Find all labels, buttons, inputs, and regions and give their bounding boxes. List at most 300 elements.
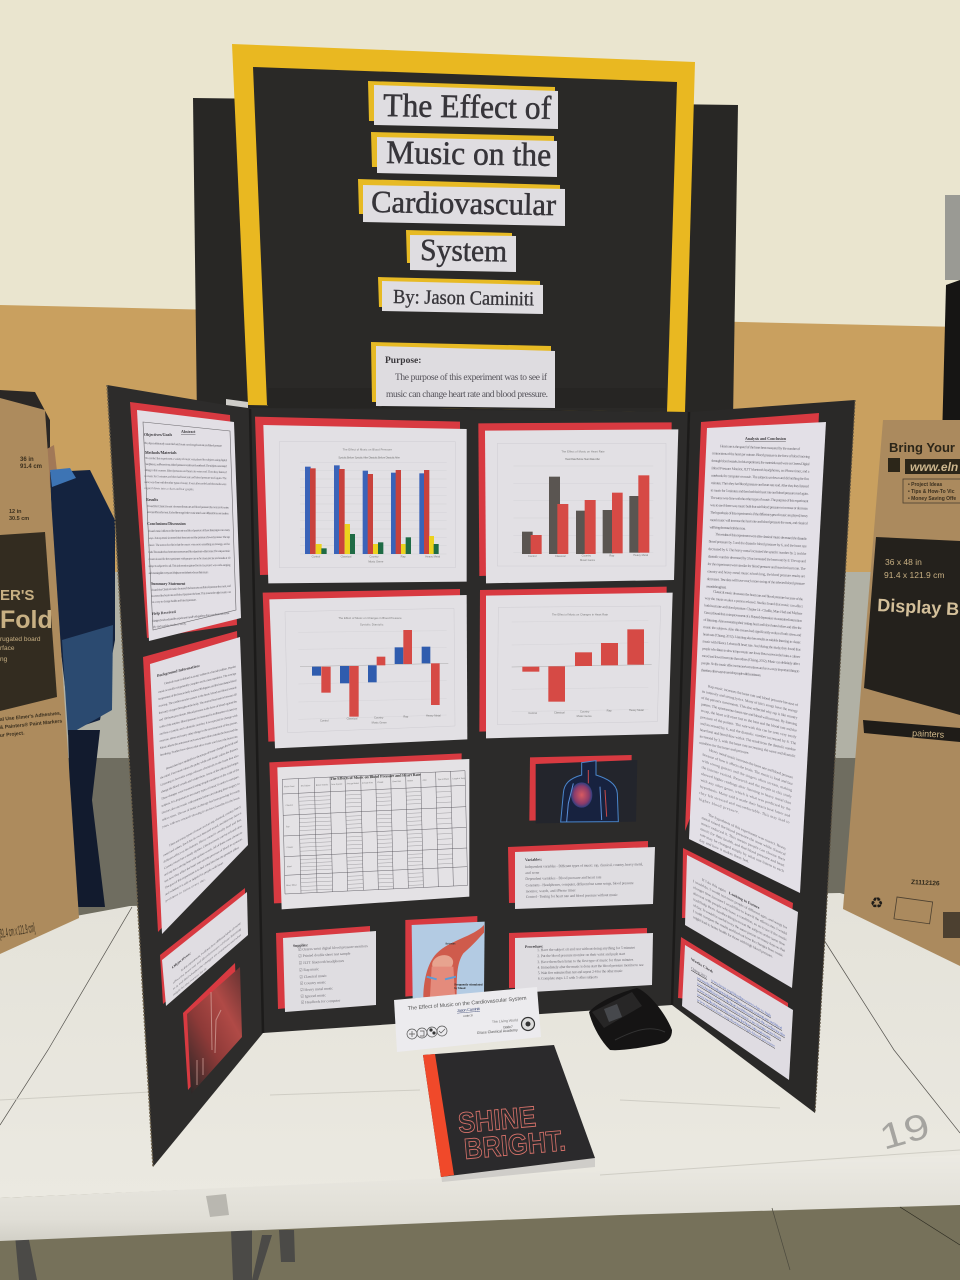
abstract text: The object of this study was to find out if music can change heart rate and blood pressure: [144, 441, 223, 448]
cardboard box: left: 12 in: [9, 509, 22, 515]
works cited list: www.heart.org/bloodpressure/what-is-high: [711, 977, 771, 1018]
background text: and rap has a strong beat with spoken words. All of these were chosen to: [164, 830, 243, 877]
abstract text: chosen is used for the experiment with proper care to be more precise and results at 10: [148, 556, 231, 561]
chart: effect of music on heart rate: Control: [528, 554, 537, 558]
chart: changes in blood pressure: Music Genre: [372, 721, 387, 725]
chart: changes in heart rate: Heavy Metal: [629, 708, 644, 712]
analysis text: music the subjects. Also this means had significantly reduced both stress and: [703, 625, 802, 637]
analysis text: to rap, the heart will react fast to the beat and the blood rate and the: [701, 709, 797, 734]
byline: [378, 277, 543, 314]
analysis text: pressure of the patient. The rate with this can be seen very easily: [700, 715, 797, 739]
background text: relieve stress. The use of music as therapy has been growing for many: [162, 788, 240, 822]
analysis text: mood and lower heart rate than others (Chiang, 2012). Music can definitely affect: [702, 654, 800, 667]
objectives text: Objectives:: [172, 950, 191, 970]
chart: effect of music on heart rate: [478, 422, 678, 583]
analysis text: Blood Pressure Monitor, JLTT bluetooth headphones, an iPhone timer, and a: [711, 466, 810, 475]
table grid: Classical: [286, 805, 293, 807]
objectives text: affect the heart rate and blood pressure of those listening: [173, 927, 241, 985]
table grid: Type of Music: [437, 777, 449, 781]
title line 4: System: [420, 232, 507, 269]
table grid: [282, 771, 468, 894]
box label text: [0, 587, 53, 663]
chart: changes in blood pressure: Systolic Diastolic: [360, 623, 384, 627]
table legs: [15, 1230, 295, 1280]
chart: changes in heart rate: The Effect of Music on Changes in Heart Rate: [552, 612, 609, 616]
background: grey lower wall: [0, 572, 960, 760]
background text: and whether it is safe or helpful for people with heart: [165, 861, 223, 896]
analysis text: of listening. Also measuring their resting heart and blood rates before and after the: [704, 618, 802, 630]
analysis text: music for their health, and that blood pressure and heart: [700, 827, 785, 869]
box label text: rface: [0, 645, 15, 652]
cardboard box: left: 36 in: [20, 457, 34, 463]
analysis text: music reduced it. This means people can choose their: [701, 821, 786, 862]
cardboard box: right: 91.4 x 121.9 cm: [884, 570, 944, 580]
black object and fan at right edge: [942, 195, 960, 452]
analysis text: The hypothesis of this experiment was correct. Heavy: [708, 813, 786, 851]
abstract text: subjects subjected to all. This information gained from my project was wide-ranging: [148, 563, 231, 568]
analysis text: for the experiment were similar for blood pressure and heart for heart rate. The: [707, 562, 806, 571]
analysis text: hypothesis. Many said it made their hearts beat faster and: [700, 784, 790, 818]
future text: I could compare the results and find out how the changes from music: [693, 909, 783, 958]
chart: changes in blood pressure: Rap: [403, 714, 409, 718]
variables text: Independent variables - Different types of music: rap, classical, country, heavy metal,: [525, 862, 643, 870]
background text: problems to listen every day.: [165, 877, 206, 903]
procedure list: 3. Have them then listen to the first type of music for three minutes: [537, 958, 634, 964]
supplies list: [293, 940, 371, 1005]
background text: These changes were measured using simple monitors on the wrist of the: [161, 767, 240, 801]
future text: a longer time, because I would like to learn if the effects stay. I would: [693, 885, 787, 937]
chart: effect of music on heart rate: Country: [582, 554, 592, 558]
analysis text: through blood vessels. In this experiment, the materials used were an Ozeres Digital: [711, 459, 810, 467]
future text: might lead to better health for those with high blood pressure.: [693, 915, 773, 959]
analysis text: of the person's movements. This also reflected why rap is like country: [701, 696, 798, 720]
chart: changes in blood pressure: Heavy Metal: [426, 713, 441, 717]
future text: could help them. Another thing is to test the subjects at the same time: [693, 897, 785, 947]
analysis text: therefore, other ways to use it for people with heart issues.: [701, 668, 761, 678]
analysis text: they felt stressed and uncomfortable. This may lead to: [699, 791, 790, 825]
data table: [269, 753, 469, 909]
abstract text: I designed and conducted the experiment myself with guidance from a professional mentor.: [152, 611, 230, 623]
works cited list: www.sciencedaily.com/releases/music-can-change-your-heart: [697, 986, 782, 1041]
analysis text: decreased by 6. The heavy metal increased the systolic number by 3, and the: [708, 547, 807, 557]
purpose card: [371, 342, 555, 408]
box right text: Bring Your: [889, 440, 955, 455]
supplies list: Supplies:: [293, 943, 308, 948]
cardboard box: right: Display B: [877, 595, 960, 619]
cardboard box: right: • Tips & How-To Vic: [908, 489, 955, 495]
chart: effect of music on blood pressure: Rap: [401, 554, 406, 558]
award icons: [407, 1026, 447, 1039]
notebook orange spine: [423, 1054, 454, 1177]
panel: procedure: [509, 928, 653, 993]
place card: Jason Caminiti: [457, 1006, 480, 1013]
supplies list: ☑ Classical music: [299, 974, 327, 979]
background text: There are many types of music such as rap, classical, country, heavy: [169, 804, 241, 849]
floor under table: [0, 1190, 960, 1280]
chart: changes in blood pressure: Classical: [347, 717, 358, 721]
chart: effect of music on heart rate: Rap: [609, 553, 615, 557]
table grid: Before: [407, 779, 413, 782]
trifold: left panel: [107, 385, 263, 1167]
place card: The Living World: [492, 1018, 518, 1024]
analysis text: Rap music increases the heart rate and blood pressure because of: [708, 684, 799, 707]
analysis text: increased by 3, with the heart rate increasing the same and diastolic: [699, 734, 796, 759]
panel: background information: [143, 631, 248, 934]
abstract text: I found that Classical music decreased heart rate and blood pressure the most and country: [147, 504, 229, 509]
chart: effect of music on blood pressure: Country: [369, 554, 379, 558]
supplies list: ☑ JLTT bluetooth headphones: [299, 959, 345, 965]
purpose card: The purpose of this experiment was to see if: [395, 372, 548, 383]
background text: walls of the arteries. Blood pressure is measured in millimetres of mercury: [159, 706, 238, 729]
analysis text: day and how it makes them feel.: [699, 838, 750, 864]
background: cream wall: [0, 0, 960, 330]
purpose card: Purpose:: [385, 356, 421, 366]
chart: effect of music on heart rate: Music Genre: [580, 558, 596, 562]
variables text: [525, 855, 644, 899]
procedure list: Procedure:: [525, 945, 543, 949]
analysis text: Analysis and Conclusion: [745, 437, 787, 441]
analysis text: both heart rate and blood pressure. Chapter 14 - Chaffin, Marc Harl and Marlene: [704, 603, 803, 617]
abstract text: to music for 5 minutes and then had heart rate and blood pressure read again. The: [145, 474, 227, 480]
abstract text: I found music influenced the heart rate and blood pressure of those listening to it in many: [148, 528, 230, 533]
analysis text: diastolic number decreased by 5 but increased the heart rate by 8. The rap and: [708, 555, 806, 563]
works cited list: www.mayoclinic.org/diseases/high-blood-pressure: [697, 997, 775, 1048]
background text: moving. The cardiovascular system is the heart, blood and blood vessels: [159, 685, 237, 709]
background text: subjects. It is important to test many types of music in order to compare.: [161, 774, 240, 808]
abstract text: copied down into a chart and bar graphs.: [144, 486, 194, 491]
chart: changes in heart rate: Rap: [607, 709, 612, 713]
table seams: [0, 907, 960, 1270]
cardboard box: left: 30.5 cm: [9, 516, 29, 522]
background text: change the blood vessels and widen them. Some of the effects last longer.: [161, 760, 239, 794]
background text: and 100 beats per minute. Blood pressure is the force of blood against the: [159, 699, 238, 722]
analysis text: The same was done with the other types of music. The purpose of this experiment: [710, 496, 809, 503]
panel: looking to future: [682, 848, 798, 988]
table grid: Music Genre: [284, 786, 295, 788]
chart: changes in blood pressure: The Effect of Music on Changes in Blood Pressure: [338, 616, 402, 620]
panel: analysis and conclusion: [685, 413, 826, 893]
place card: Grade: 7: [503, 1025, 513, 1029]
abstract text: Objectives/Goals: [144, 433, 173, 437]
objectives text: to it, and find whether the changes are consistent and what: [173, 933, 241, 992]
analysis text: its intensity and strong lyrics. Many of life's songs have the energy: [702, 689, 798, 714]
cardboard box: right: www.eln: [910, 460, 958, 474]
chart: changes in blood pressure: Control: [320, 718, 329, 722]
cardboard box: right: • Money Saving Offe: [908, 496, 956, 502]
background text: music is usually not generally complex and is more repetitive. The average: [158, 671, 237, 694]
future text: Looking to Future: [729, 890, 760, 910]
procedure list: 6. Complete steps 1-5 with 5 other subjects: [538, 975, 598, 981]
image: artery diagram: Frequently stimulated: [454, 983, 483, 987]
variables text: monitor, watch, and iPhone timer: [526, 888, 577, 894]
abstract text: be a way to change health and blood pressure.: [151, 598, 197, 604]
background text: metal and others. Each has its own beat and mood, and this may have a: [163, 811, 242, 858]
panel: works cited: [678, 937, 793, 1080]
analysis text: Heavy metal music increases the heart rate and blood pressure: [709, 748, 794, 780]
analysis text: recorded rough test.: [706, 585, 727, 590]
chart: effect of music on blood pressure: Heavy Metal: [425, 554, 441, 558]
chart: changes in heart rate: Classical: [554, 710, 565, 714]
abstract text: Results: [146, 498, 159, 502]
cardboard box: right: 36 x 48 in: [885, 557, 922, 567]
analysis text: and increased by 6, and the diastolic number increased by 8. The: [700, 721, 797, 747]
chart: effect of music on blood pressure: The Effect of Music on Blood Pressure: [343, 448, 393, 452]
analysis text: country and heavy metal music is both long, the blood pressure results are: [707, 570, 806, 579]
supplies list: ☑ Rap music: [299, 967, 320, 972]
analysis text: The hypothesis of this experiment is if the different types of music are played, heavy: [710, 511, 808, 519]
notebook slogan: [457, 1101, 567, 1166]
trifold: right panel: [672, 400, 855, 1113]
future text: [693, 872, 788, 966]
table grid: Heavy Metal: [286, 884, 297, 887]
box label text: Fold: [0, 606, 53, 634]
title line 1: The Effect of: [383, 88, 551, 127]
chart: effect of music on heart rate: Classical: [555, 554, 566, 558]
box label text: ER'S: [0, 587, 34, 604]
background text: Researchers have studied how the tempo of music changes the body and: [166, 739, 238, 771]
supplies list: ☑ Headbook for computer: [301, 999, 341, 1005]
table grid: Before Systolic: [316, 783, 328, 787]
background text: Classical music is defined as music written in a formal tradition. Popular: [164, 664, 237, 686]
image: cardiovascular system: [529, 755, 637, 823]
center chart group: [255, 417, 678, 748]
analysis text: people. So the music effect someone's emotions and so is a very important thing to: [701, 661, 800, 673]
analysis text: way the music makes a person relaxed. Studies found that music can affect: [705, 596, 803, 609]
procedure list: [525, 942, 644, 981]
notebook cover: [423, 1045, 595, 1177]
background text: Listening to favourite songs releases chemicals in the brain that also: [160, 753, 239, 787]
background text: breathing. Studies have shown that slow music can lower the heart rate.: [160, 734, 238, 757]
background text: Music affects the autonomic nervous system that controls the heart and the: [160, 727, 239, 750]
analysis text: with any other genre, which is what was predicted by the: [700, 778, 791, 813]
abstract text: Abstract: [181, 430, 196, 434]
analysis text: metal music will increase the heart rate and blood pressure the most, and classical: [710, 518, 808, 526]
objectives text: might be the reason for it.: [173, 966, 207, 997]
table grid: Test Subject: [300, 785, 311, 787]
analysis text: metal raised the blood pressure the most while classical: [701, 816, 786, 857]
abstract text: Help Received: [152, 610, 177, 616]
notebook slogan: BRIGHT.: [463, 1125, 567, 1166]
background text: Doctors also use music with patients before and during their surgery to: [162, 781, 240, 815]
analysis text: blood pressure by 5 and the diastolic blood pressure by 6, and the heart rate: [709, 540, 807, 549]
background: tan wall panel: [0, 305, 960, 572]
abstract text: ways - but rap music increased their heart rate and the pressure showed increase. The rap: [148, 535, 231, 540]
chart: effect of music on blood pressure: Systolic Before Systolic After Diastolic Before Diastolic After: [338, 455, 400, 459]
handwritten table number: 19: [875, 1104, 934, 1158]
supplies list: ☑ Printed double sheet rest sample: [298, 951, 351, 958]
abstract text: My dad read the results to verify.: [152, 621, 187, 629]
supplies list: ☑ Ignored music: [301, 993, 326, 999]
analysis text: Green) found that an improvement of a Haysed depression via sustained interaction: [704, 611, 802, 623]
title line 3: Cardiovascular: [371, 184, 557, 222]
supplies list: ☑ Heavy metal music: [300, 986, 333, 992]
byline: By: Jason Caminiti: [393, 286, 535, 310]
background text: [157, 663, 244, 903]
chart: effect of music on heart rate: The Effect of Music on Heart Rate: [561, 450, 605, 454]
chart: changes in heart rate: [479, 587, 673, 738]
place card: Location: 19: [463, 1013, 473, 1018]
background text: temperature of the human body is about 98 degrees and the heart keeps blood: [158, 678, 237, 701]
abstract text: Summary Statement: [151, 582, 186, 586]
works cited list: Works Cited:: [691, 956, 714, 975]
abstract text: music. The reason for this is that the music was more unsettling and energy, and so: [148, 542, 231, 548]
abstract text: Conclusions/Discussion: [147, 522, 187, 526]
chart: effect of music on heart rate: Heart Rate Before Heart Rate After: [565, 457, 600, 461]
person behind boards: [0, 390, 115, 907]
chart: effect of music on heart rate: Heavy Metal: [633, 553, 649, 557]
table top: [0, 893, 960, 1198]
school seal: [522, 1018, 534, 1030]
background: concrete floor behind table: [0, 758, 960, 918]
analysis text: with strong guitars and the singers often scream, making: [702, 759, 792, 793]
cardboard box: left: 91.4 cm: [20, 464, 42, 470]
background text: exercise, stress and many other things in the environment of the person.: [160, 720, 238, 744]
table grid: Average Before: [346, 782, 359, 785]
analysis text: the listener excited. Research and the people in this study: [701, 765, 792, 799]
notebook slogan: SHINE: [457, 1101, 537, 1140]
analysis text: heart beat and blood flow with it. The result from the diastolic number: [700, 728, 797, 752]
table grid: Heart Rate: [392, 781, 401, 783]
rear display board: [193, 98, 738, 420]
analysis text: showed higher readings after listening to heavy metal than: [701, 772, 791, 805]
future text: of day. It would be useful to try the same person on many days so that: [693, 903, 786, 953]
trifold: center panel: [248, 408, 690, 1033]
place card title: The Effect of Music on the Cardiovascular System: [408, 996, 527, 1012]
variables text: and none: [525, 871, 540, 875]
table front lip: [0, 1155, 960, 1241]
cardboard box: left: & Painters® Paint Markers: [0, 717, 63, 731]
abstract text: To conduct this experiment a variety of music was played for subjects using digital: [145, 456, 227, 462]
procedure list: 2. Put the blood pressure monitor on their wrist and push start: [537, 952, 625, 958]
objectives text: In this experiment, I will test how different kinds of music: [181, 921, 241, 973]
panel: variables: [508, 841, 655, 909]
background text: test how they affect the heart rate and the pressure of blood in a person.: [164, 837, 243, 883]
table grid: Country: [287, 847, 293, 849]
abstract text: [144, 430, 232, 629]
white tag on board top: [226, 399, 248, 408]
cardboard box: left: al Use Elmer's Adhesives,: [0, 711, 62, 723]
background text: that carry oxygen throughout the body. The normal heart rate is between 60: [159, 692, 237, 715]
table creases: [0, 1090, 960, 1175]
analysis text: music with Blanca Lebensohl heart rate. And during the study, they found that: [702, 639, 801, 653]
background text: Country music has a steady rhythm. Classical music can be soft and slow: [164, 824, 243, 870]
analysis text: because of how it affects the brain. The music is loud and fast: [702, 752, 794, 786]
chart: changes in blood pressure: Country: [374, 716, 384, 720]
table grid: Change: [377, 781, 383, 784]
cardboard box: left: ur Project.: [0, 730, 25, 739]
variables text: Dependent variables - Blood pressure and heart rate: [525, 875, 602, 881]
table grid: After: [422, 778, 427, 782]
panel: abstract: [130, 402, 241, 641]
chart: effect of music on blood pressure: Classical: [341, 554, 352, 558]
background text: the mind. Fast music raises the pulse while soft music calms the listener.: [160, 746, 239, 780]
image: artery diagram: Arteries: [445, 941, 456, 945]
cardboard box: right: • Project Ideas: [908, 482, 942, 488]
cardboard box: left: [91.4 cm x 121.9 cm]: [0, 920, 36, 941]
variables text: Constants - Headphones, computer, different but same songs, blood pressure: [526, 881, 634, 888]
abstract text: headphones, an iPhone timer, a blood pressure monitor and a notebook. The subjects were tested: [145, 462, 227, 469]
notebook: shine bright: [423, 1045, 595, 1182]
variables text: Control - Testing for heart rate and blood pressure without music: [526, 893, 618, 899]
table grid: Rap: [286, 826, 289, 828]
chart: changes in heart rate: Country: [580, 710, 590, 714]
table title: The Effects of Music on Blood Pressure and Heart Rate: [330, 772, 421, 781]
box label text: rugated board: [0, 636, 41, 643]
background text: different effect on the listener. Heavy metal is usually loud and fast.: [164, 817, 242, 864]
analysis text: heart rate (Chiang, 2012). Listening also lets results as suitable listening to classic: [703, 632, 801, 646]
works cited list: www.medicalnewstoday.com/articles/heart-rate-and-music: [697, 991, 771, 1041]
supplies list: ☑ Ozeres wrist digital blood pressure monitors: [298, 944, 368, 952]
abstract text: same was done with the other types of music. It was all recorded and the results were: [144, 480, 227, 486]
box dark panel: [0, 532, 57, 711]
chart: changes in blood pressure: [263, 589, 467, 748]
table grid: After Systolic: [331, 782, 342, 786]
cardboard box: right: ♻: [870, 895, 883, 912]
image: artery diagram: [405, 916, 485, 998]
future text: also test with people who have a condition, so as to see if the music: [693, 891, 787, 943]
chart: effect of music on blood pressure: [255, 417, 467, 583]
abstract text: sitting in this manner. Blood pressure and heart rate were read. Then they listened: [145, 468, 227, 474]
wrist blood pressure monitor: [589, 988, 672, 1050]
abstract text: I found that Classical music decreased the heart rate and blood pressure the most, and: [151, 584, 231, 593]
procedure list: 5. Wait five minutes then test and repeat 2-4 for the other music: [538, 969, 623, 975]
analysis text: contractions of the heart per minute. Blood pressure is the force of blood moving: [712, 451, 810, 459]
analysis text: minutes. Then they had blood pressure and heart rate read. After that, they listened: [711, 481, 809, 489]
table grid: Length of Song: [452, 777, 465, 780]
analysis text: people who listen to slow tempo music use fewer Beta waves in the brain, a calmer: [702, 647, 801, 660]
background text: years, with new research showing it can have benefits for the heart.: [162, 795, 240, 830]
analysis text: Heart rate is the speed of the heart beat measured by the number of: [720, 444, 801, 451]
procedure list: 4. Immediately after the music is done start the blood pressure monitor to see: [537, 963, 644, 970]
tape on table edge: [206, 1194, 229, 1217]
cardboard box: right: [843, 420, 960, 966]
title line 2: Music on the: [386, 135, 551, 174]
chart: changes in heart rate: Control: [528, 711, 537, 715]
place card: Grace Classical Academy: [477, 1028, 518, 1035]
panel: objectives: [160, 888, 248, 1006]
cardboard box: right: painters: [912, 728, 945, 740]
analysis text: to music for 5 minutes and then had their heart rate and blood pressure read again.: [711, 488, 809, 496]
analysis text: will bring decrease both the most.: [710, 525, 746, 531]
future text: If I do this again: [702, 878, 726, 893]
chart: effect of music on blood pressure: Music Genre: [368, 560, 384, 564]
table grid: Metal: [287, 866, 292, 868]
analysis text: Classical music decreases the heart rate and blood pressure because of the: [713, 590, 804, 601]
abstract text: and meaningful to everyone. It helps me and others to choose their music.: [149, 570, 209, 575]
chart: effect of music on blood pressure: Control: [312, 554, 321, 558]
supplies list: ☑ Country music: [300, 980, 326, 986]
analysis text: pattern. The spontaneous heart rate and blood will increase. By listening: [701, 702, 797, 726]
box label text: ng: [0, 656, 8, 663]
variables text: Variables:: [525, 858, 542, 862]
image: artery diagram: by blood: [454, 986, 466, 990]
background text: Background Information:: [157, 663, 200, 678]
works cited list: www.ncbi.nlm.nih.gov/pubmed/effects-of-music-on-heart-rate-and-blood: [697, 975, 782, 1031]
place card: [394, 987, 541, 1052]
procedure list: 1. Have the subject sit and rest without doing anything for 5 minutes: [537, 946, 636, 952]
abstract text: increased them the most. Each of the songs for the music tested were different from one another.: [147, 510, 229, 515]
box right dark panel: [864, 537, 960, 715]
cardboard box: right: Z1112126: [911, 879, 940, 888]
background text: The goal of this experiment is to find what kind has the greatest effect: [165, 845, 239, 890]
image: red neon photo on left panel: [183, 963, 242, 1094]
abstract text: forth. The results show heart rate measures and blood pressure will increase. The unique music: [148, 549, 231, 554]
board edges and folds: [107, 385, 855, 1167]
future text: I would do. I would test more people of different ages, and songs for: [693, 879, 788, 931]
panel: supplies: [276, 926, 376, 1012]
analysis text: notebook for computer or music. The subjects sat down and did nothing for five: [711, 474, 810, 481]
analysis text: [699, 437, 810, 879]
